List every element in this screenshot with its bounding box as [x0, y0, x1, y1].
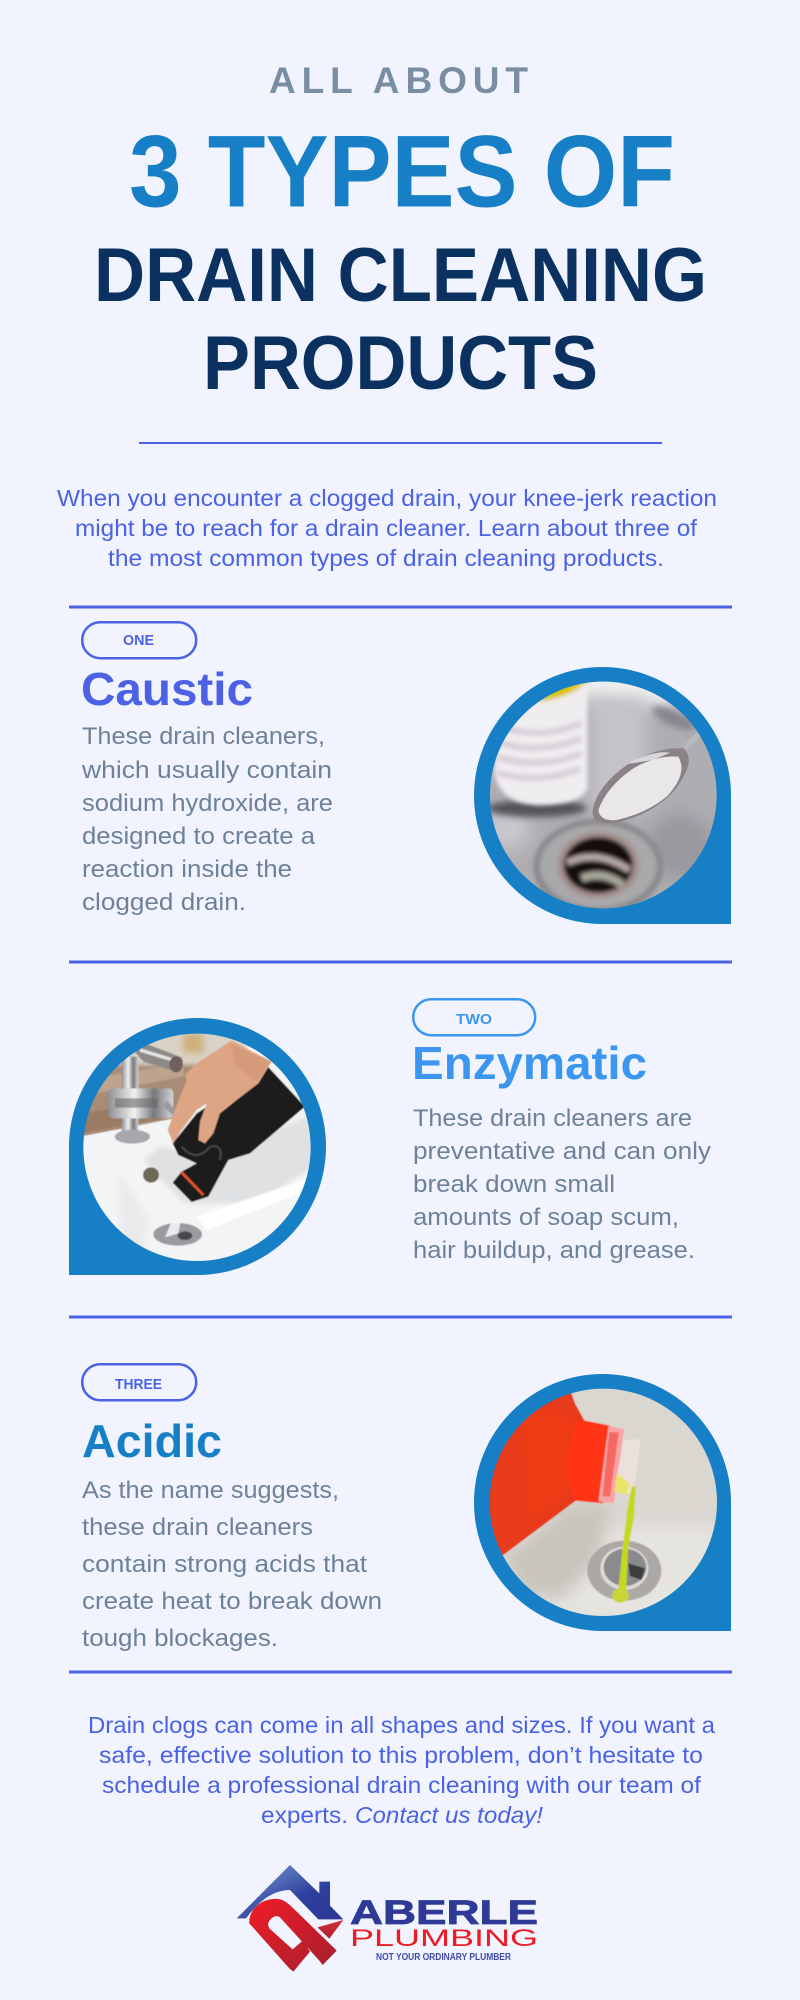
- heading: caustic: Caustic: [81, 663, 253, 715]
- panel: enzymatic text: [412, 999, 711, 1264]
- closing paragraph: Contact us today!: [355, 1802, 544, 1828]
- body: acidic description: create heat to break down: [82, 1588, 382, 1615]
- logo: aberle plumbing: [237, 1865, 538, 1972]
- intro paragraph: the most common types of drain cleaning products.: [108, 545, 664, 571]
- body: enzymatic description: hair buildup, and grease.: [413, 1237, 695, 1264]
- body: enzymatic description: These drain cleaners are: [413, 1105, 692, 1132]
- body: enzymatic description: break down small: [413, 1171, 615, 1198]
- badge: two: [413, 999, 535, 1035]
- badge: two: TWO: [456, 1012, 492, 1028]
- badge: one: ONE: [123, 633, 154, 649]
- teardrop frame: [69, 1018, 326, 1275]
- body: enzymatic description: [413, 1105, 711, 1264]
- teardrop frame: [474, 667, 731, 924]
- body: caustic description: [81, 723, 333, 916]
- intro paragraph: [57, 485, 717, 571]
- heading: enzymatic: Enzymatic: [412, 1037, 647, 1089]
- body: acidic description: [82, 1477, 382, 1652]
- intro paragraph: might be to reach for a drain cleaner. Learn about three of: [75, 515, 697, 541]
- body: caustic description: which usually contain: [81, 757, 332, 784]
- title: drain cleaning: DRAIN CLEANING: [94, 233, 707, 318]
- logo wordmark: plumbing: PLUMBING: [350, 1925, 538, 1952]
- photo: hand pouring black bottle: [80, 1030, 317, 1267]
- body: acidic description: As the name suggests,: [82, 1477, 339, 1504]
- eyebrow: all about: ALL ABOUT: [269, 60, 528, 101]
- body: caustic description: These drain cleaners,: [82, 723, 325, 750]
- closing paragraph: safe, effective solution to this problem, don’t hesitate to: [99, 1742, 703, 1768]
- body: acidic description: these drain cleaners: [82, 1514, 313, 1541]
- body: caustic description: clogged drain.: [82, 889, 246, 916]
- badge: three: THREE: [115, 1377, 162, 1393]
- closing paragraph: experts.: [261, 1802, 348, 1828]
- body: caustic description: designed to create a: [82, 823, 316, 850]
- body: enzymatic description: amounts of soap scum,: [413, 1204, 679, 1231]
- photo: spoon of powder above drain: [490, 682, 717, 908]
- logo wordmark: aberle: ABERLE: [350, 1894, 538, 1932]
- body: caustic description: sodium hydroxide, are: [82, 790, 333, 817]
- body: caustic description: reaction inside the: [82, 856, 292, 883]
- title: products: PRODUCTS: [203, 321, 598, 406]
- badge: one: [82, 622, 196, 658]
- photo: red bottle pouring yellow liquid: [490, 1388, 717, 1616]
- closing paragraph: Drain clogs can come in all shapes and sizes. If you want a: [88, 1712, 715, 1738]
- intro paragraph: When you encounter a clogged drain, your knee-jerk reaction: [57, 485, 717, 511]
- image: acidic liquid pouring into drain: [474, 1374, 731, 1631]
- teardrop frame: [474, 1374, 731, 1631]
- body: enzymatic description: preventative and can only: [413, 1138, 711, 1165]
- logo tagline: NOT YOUR ORDINARY PLUMBER: [376, 1951, 511, 1963]
- body: acidic description: contain strong acids that: [82, 1551, 367, 1578]
- title: 3 types of: 3 TYPES OF: [129, 114, 675, 228]
- closing paragraph: schedule a professional drain cleaning with our team of: [102, 1772, 702, 1798]
- header: [94, 60, 707, 406]
- body: acidic description: tough blockages.: [82, 1625, 278, 1652]
- logo icon: house and pipe: [237, 1865, 343, 1972]
- image: caustic powder over sink: [474, 660, 731, 924]
- badge: three: [82, 1364, 196, 1400]
- heading: acidic: Acidic: [82, 1415, 222, 1467]
- image: enzymatic bottle over sink: [69, 1018, 326, 1275]
- panel: acidic text: [82, 1364, 382, 1652]
- closing paragraph: [88, 1712, 715, 1828]
- panel: caustic text: [81, 622, 333, 916]
